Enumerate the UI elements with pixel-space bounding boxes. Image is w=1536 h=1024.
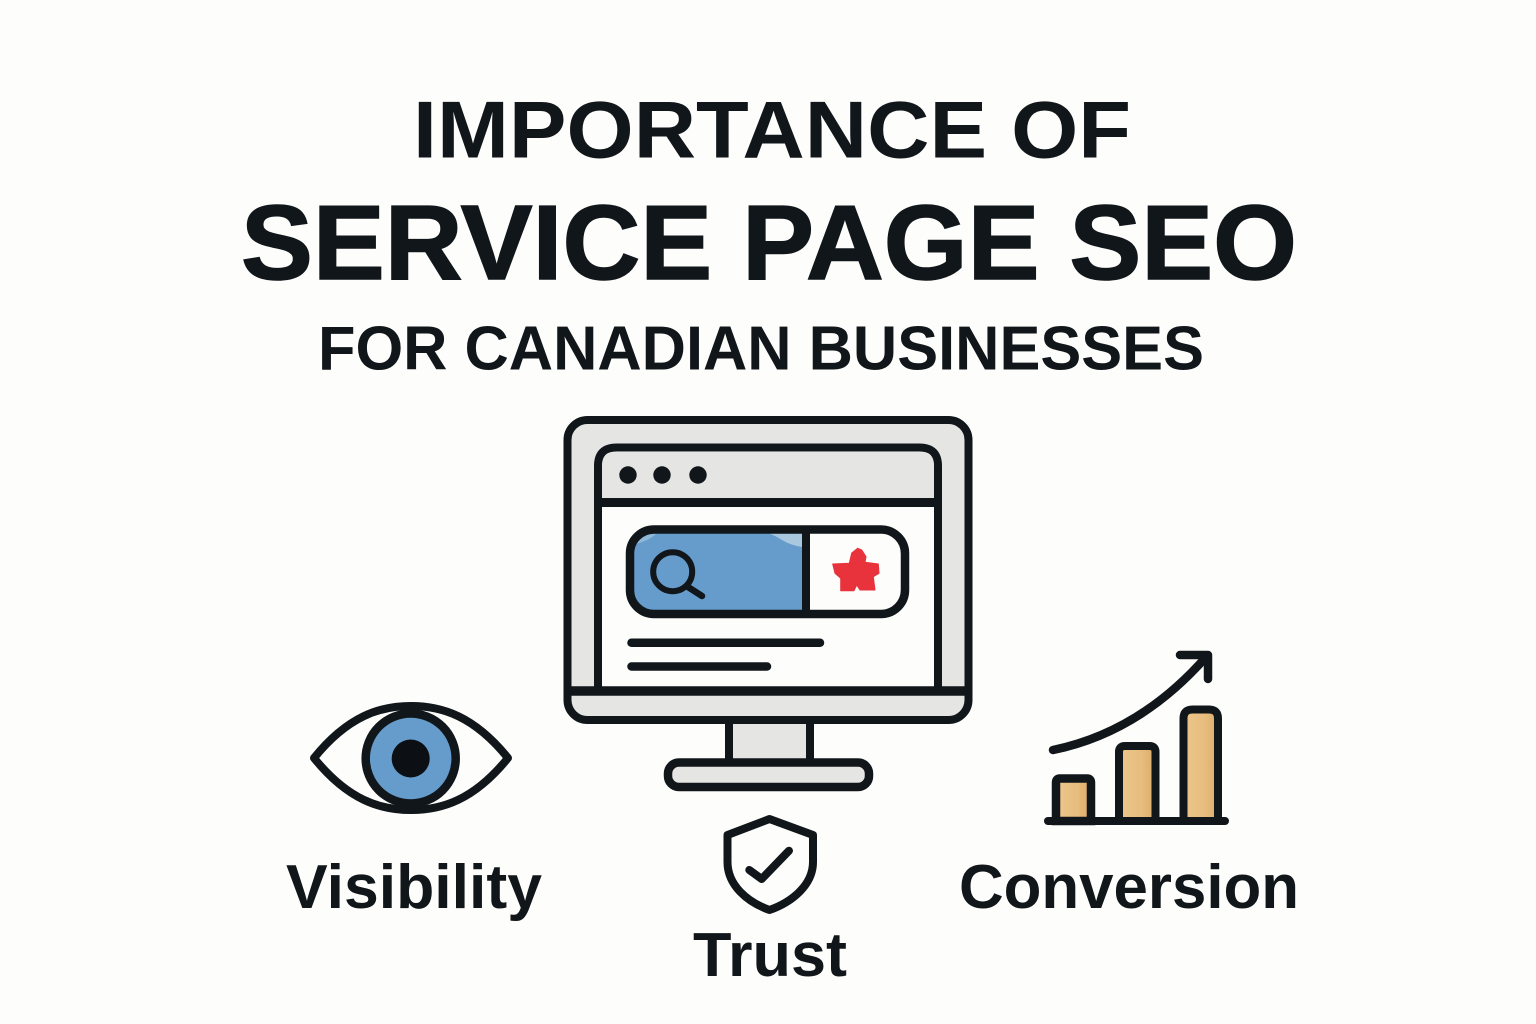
bar: tall xyxy=(1184,710,1218,821)
icon: shield with check xyxy=(728,819,813,910)
label: Visibility: Visibility xyxy=(286,853,543,922)
title: FOR CANADIAN BUSINESSES xyxy=(318,314,1204,384)
bar: medium xyxy=(1119,746,1156,821)
search bar xyxy=(630,529,905,614)
label: Trust: Trust xyxy=(693,921,847,990)
title: SERVICE PAGE SEO xyxy=(241,184,1297,302)
title: IMPORTANCE OF xyxy=(413,86,1131,176)
text lines xyxy=(632,643,820,666)
icon: growth bar chart xyxy=(1048,655,1225,821)
title xyxy=(241,86,1297,384)
arrow: growth trend xyxy=(1053,655,1208,750)
label: Conversion: Conversion xyxy=(959,853,1299,922)
icon: computer monitor xyxy=(567,420,969,787)
bar: small xyxy=(1056,778,1091,821)
icon: eye xyxy=(314,706,508,810)
